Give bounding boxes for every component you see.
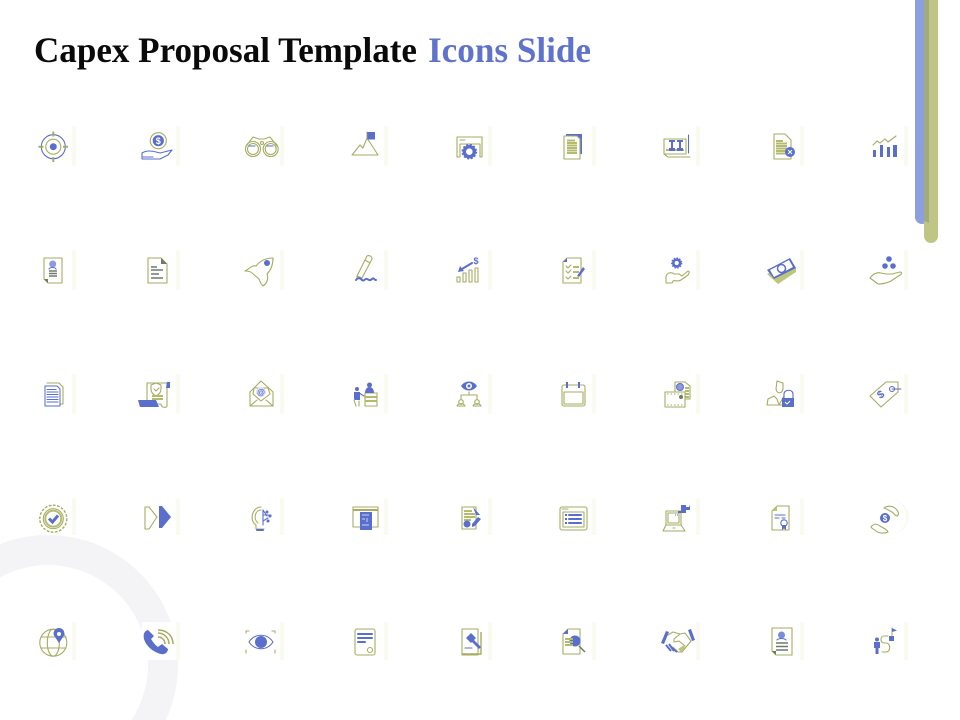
icon: user and lock: [766, 374, 804, 414]
icon: calendar: [558, 374, 596, 414]
icon: list window: [558, 498, 596, 535]
icon: email envelope: [246, 374, 284, 414]
icon: globe with pin: [38, 622, 76, 660]
icon: document blue corner: [558, 126, 596, 166]
icon: document magnifier: [558, 622, 596, 660]
icon: handshake: [661, 622, 700, 660]
icon: double arrow: [142, 498, 180, 535]
icon: scroll shield: [138, 374, 180, 414]
icon: eye org chart: [454, 374, 492, 414]
icon: growth chart: [870, 126, 908, 166]
icon: hands with coin: [868, 498, 909, 536]
icon: phone call: [142, 622, 180, 660]
accent bar: blue: [915, 0, 929, 224]
decorative ring bottom left: [0, 535, 178, 720]
icon: certificate: [766, 498, 804, 535]
icon: profile document two: [766, 622, 804, 660]
accent bar: green: [924, 0, 938, 243]
icon: office desk: [350, 374, 388, 414]
icon: decline bars: $: [473, 256, 479, 266]
icon: eye focus: [246, 622, 284, 660]
icon: document bars: [350, 622, 388, 660]
icon: laptop upload: [662, 498, 700, 535]
icon: email envelope: @: [257, 388, 265, 397]
icon: binoculars: [246, 126, 284, 166]
icon: document with x: [766, 126, 804, 166]
icon: coin on hand: $: [156, 136, 161, 146]
icon: chess plan: [662, 126, 700, 166]
icon: coin on hand: [142, 126, 180, 166]
icon: text document: [142, 250, 180, 290]
icon: profile document: [38, 250, 76, 290]
icon: document and tools: [454, 498, 492, 535]
icon: person path flag: [870, 622, 908, 660]
icon: legal gavel: [454, 622, 492, 660]
icon: card and document: [662, 374, 700, 414]
icon: banknotes stack: [766, 250, 804, 290]
icon: window with phone: [350, 498, 388, 535]
icon: mountain with flag: [350, 126, 388, 166]
icon: decline bars: [454, 250, 492, 290]
icon: stacked documents: [38, 374, 76, 414]
icon: price tag: $: [875, 388, 887, 402]
icon: dots over hand: [870, 250, 908, 290]
icon: pen signature: [350, 250, 388, 290]
icon: hands with coin: $: [883, 514, 888, 523]
icon: price tag: [870, 374, 908, 414]
icon: checklist with pen: [558, 250, 596, 290]
icon: idea bulb: [246, 498, 284, 535]
icon: gear on hand: [662, 250, 700, 290]
icon: rocket: [245, 250, 284, 290]
icon: browser gear: [454, 126, 492, 166]
icon: verified badge: [38, 498, 76, 535]
title: Icons Slide: [428, 30, 591, 70]
icon: target: [38, 126, 76, 166]
title: Capex Proposal Template: [34, 30, 417, 70]
